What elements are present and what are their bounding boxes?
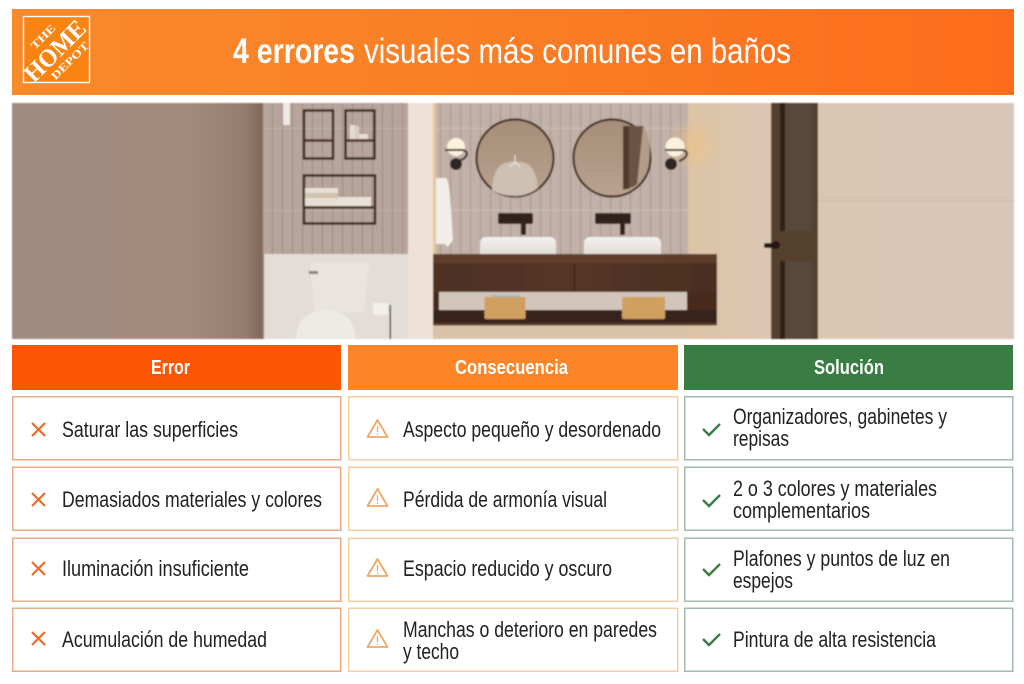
row: Pintura de alta resistencia <box>685 608 1013 671</box>
left wall <box>12 103 264 339</box>
photo: bathroom with double vanity <box>12 103 1014 339</box>
row: Pintura de alta resistencia: Pintura de alta resistencia <box>733 627 937 652</box>
row: Organizadores, gabinetes y repisas <box>685 397 1013 460</box>
right wall <box>688 103 1014 339</box>
row: Acumulación de humedad <box>13 608 341 671</box>
baskets <box>484 295 665 319</box>
logo: The Home Depot: DEPOT <box>49 40 92 83</box>
toilet paper holder <box>373 303 391 339</box>
row: Manchas o deterioro en paredes y techo: y techo <box>403 639 459 664</box>
mirrors <box>476 120 650 196</box>
row: 2 o 3 colores y materiales complementarios: 2 o 3 colores y materiales <box>733 476 937 501</box>
row: Espacio reducido y oscuro <box>349 538 678 601</box>
row: Saturar las superficies <box>13 397 341 460</box>
row: Acumulación de humedad: Acumulación de humedad <box>62 627 267 652</box>
logo: The Home Depot: THE <box>29 22 58 52</box>
table header: Error: Error <box>151 357 190 379</box>
table header: Solución: Solución <box>814 357 884 379</box>
towel <box>436 178 453 247</box>
vanity <box>433 254 717 326</box>
wall shelves <box>304 110 375 224</box>
row: Aspecto pequeño y desordenado: Aspecto pequeño y desordenado <box>403 417 661 442</box>
row: Manchas o deterioro en paredes y techo <box>349 608 678 671</box>
left tiled wall <box>262 103 409 339</box>
row: Saturar las superficies: Saturar las superficies <box>62 417 238 442</box>
title: visuales más comunes en baños <box>364 32 791 71</box>
title banner <box>11 7 1014 95</box>
row: Demasiados materiales y colores <box>13 467 341 530</box>
basins <box>480 237 661 259</box>
row: Plafones y puntos de luz en espejos: espejos <box>733 568 793 593</box>
back tiled wall <box>433 103 688 255</box>
row: Plafones y puntos de luz en espejos <box>685 538 1013 601</box>
wall lamps <box>445 138 687 170</box>
row: 2 o 3 colores y materiales complementarios: complementarios <box>733 498 870 523</box>
table header: Error <box>12 345 341 390</box>
column: Error <box>13 397 341 671</box>
row: Pérdida de armonía visual: Pérdida de armonía visual <box>403 487 607 512</box>
row: Iluminación insuficiente: Iluminación insuficiente <box>62 556 249 581</box>
column: Consecuencia <box>349 397 678 671</box>
column: Solución <box>685 397 1013 671</box>
row: 2 o 3 colores y materiales complementarios <box>685 467 1013 530</box>
row: Espacio reducido y oscuro: Espacio reducido y oscuro <box>403 556 612 581</box>
row: Aspecto pequeño y desordenado <box>349 397 678 460</box>
table header: Consecuencia <box>348 345 678 390</box>
toilet <box>296 263 369 339</box>
faucets <box>498 213 631 235</box>
title: 4 errores <box>233 32 355 71</box>
row: Pérdida de armonía visual <box>349 467 678 530</box>
table header: Solución <box>684 345 1013 390</box>
row: Demasiados materiales y colores: Demasiados materiales y colores <box>62 487 322 512</box>
row: Organizadores, gabinetes y repisas: repisas <box>733 426 789 451</box>
row: Iluminación insuficiente <box>13 538 341 601</box>
row: Plafones y puntos de luz en espejos: Plafones y puntos de luz en <box>733 546 950 571</box>
row: Manchas o deterioro en paredes y techo: Manchas o deterioro en paredes <box>403 617 657 642</box>
row: Organizadores, gabinetes y repisas: Organizadores, gabinetes y <box>733 404 947 429</box>
pillar <box>408 103 433 339</box>
logo: The Home Depot: HOME <box>19 15 92 88</box>
table header: Consecuencia: Consecuencia <box>455 357 569 379</box>
door <box>764 103 818 339</box>
title <box>233 32 791 71</box>
